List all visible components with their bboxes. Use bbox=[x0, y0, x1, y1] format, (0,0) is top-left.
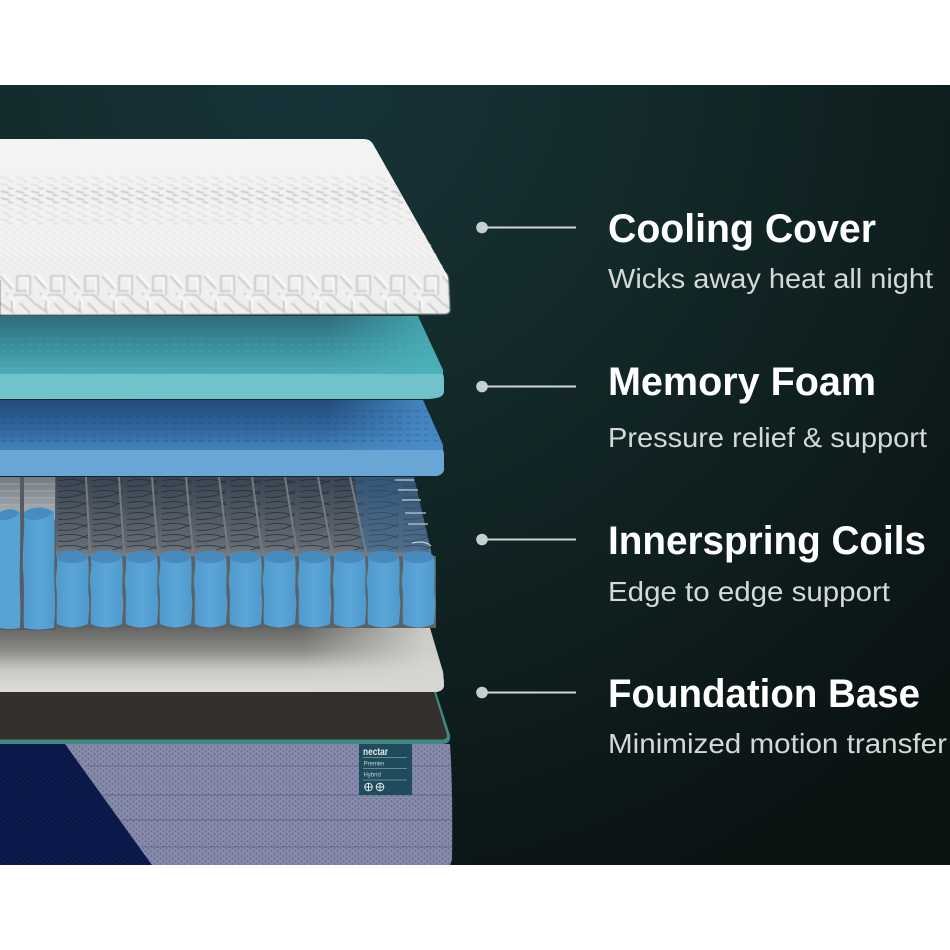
brand name: nectar bbox=[363, 746, 388, 758]
heading: Innerspring Coils bbox=[608, 519, 926, 563]
pocket row bbox=[55, 551, 436, 628]
description: Minimized motion transfer bbox=[608, 728, 947, 759]
tall left pockets bbox=[0, 477, 56, 630]
callout: Cooling Cover bbox=[476, 207, 933, 294]
layer: innerspring coils bbox=[0, 477, 436, 630]
cover woven front bbox=[0, 273, 450, 315]
layer: teal memory foam bbox=[0, 316, 444, 399]
description: Pressure relief & support bbox=[608, 422, 927, 453]
description: Edge to edge support bbox=[608, 576, 890, 607]
foundation base side panel bbox=[0, 744, 452, 865]
layer: cooling cover bbox=[0, 139, 450, 315]
heading: Foundation Base bbox=[608, 672, 920, 716]
coil backing bbox=[0, 477, 435, 628]
description: Wicks away heat all night bbox=[608, 263, 933, 294]
layer: support base foam bbox=[0, 628, 444, 692]
icons: snowflakes bbox=[365, 783, 384, 791]
spring wires bbox=[56, 477, 431, 550]
brand label bbox=[359, 744, 412, 795]
callout: Innerspring Coils bbox=[476, 519, 926, 607]
layer: blue comfort foam bbox=[0, 400, 444, 476]
navy corner panel bbox=[0, 744, 152, 865]
cover dotted band bbox=[0, 176, 416, 224]
label: Hybrid: Hybrid bbox=[364, 772, 381, 778]
heading: Cooling Cover bbox=[608, 207, 876, 251]
column dividers bbox=[86, 477, 366, 552]
cover top surface bbox=[0, 139, 448, 280]
heading: Memory Foam bbox=[608, 360, 876, 404]
foundation top, dark layer bbox=[0, 691, 450, 744]
callout: Memory Foam bbox=[476, 360, 927, 453]
label: Premier: Premier bbox=[364, 762, 385, 768]
callout: Foundation Base bbox=[476, 672, 947, 759]
